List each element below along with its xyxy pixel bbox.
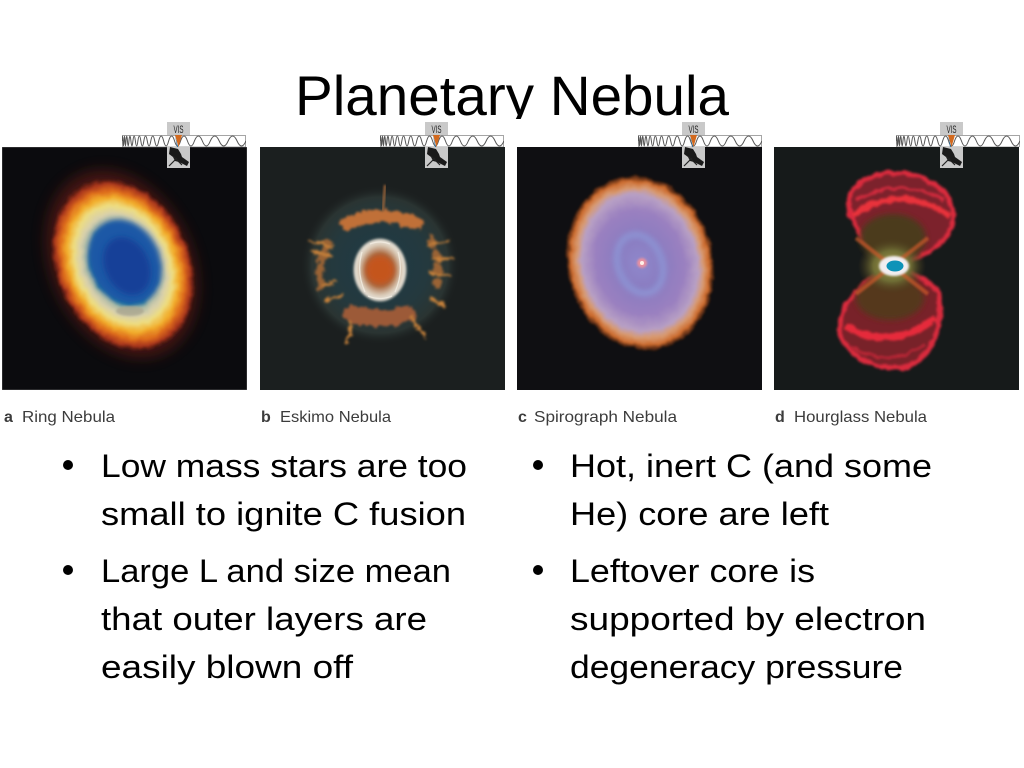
- bullet: low mass stars: [63, 448, 467, 532]
- panel: Eskimo Nebula: [260, 122, 505, 426]
- bullet: leftover core: [533, 553, 926, 685]
- left bullet list: [63, 448, 467, 685]
- spectrum icon c: VIS: [688, 124, 698, 136]
- bullet: leftover core: degeneracy pressure: [570, 649, 903, 685]
- panel: Ring Nebula: [2, 122, 247, 426]
- bullet: hot inert core: Hot, inert C (and some: [570, 448, 932, 484]
- photo: Ring Nebula: [2, 146, 247, 390]
- photo: Hourglass Nebula: [774, 147, 1019, 390]
- spectrum icon c: [638, 122, 762, 168]
- panel: Spirograph Nebula: [517, 122, 762, 426]
- bullet: leftover core: Leftover core is: [570, 553, 815, 589]
- caption b: Eskimo Nebula: [280, 409, 391, 426]
- spectrum icon d: [896, 122, 1020, 168]
- bullet: leftover core: supported by electron: [570, 601, 926, 637]
- spectrum icon b: [380, 122, 504, 168]
- caption d: Hourglass Nebula: [794, 409, 927, 426]
- caption a: Ring Nebula: [22, 409, 115, 426]
- bullet: large L and size: Large L and size mean: [101, 553, 451, 589]
- caption c: Spirograph Nebula: [534, 409, 677, 426]
- bullet: large L and size: that outer layers are: [101, 601, 427, 637]
- caption b: b: [261, 409, 271, 426]
- bullet: hot inert core: He) core are left: [570, 496, 829, 532]
- spectrum icon a: VIS: [174, 124, 184, 136]
- spectrum icon a: [122, 122, 246, 168]
- spectrum icon d: VIS: [946, 124, 956, 136]
- bullet: low mass stars: Low mass stars are too: [101, 448, 467, 484]
- caption a: a: [4, 409, 13, 426]
- bullet: large L and size: easily blown off: [101, 649, 353, 685]
- bullet: low mass stars: small to ignite C fusion: [101, 496, 466, 532]
- panel: Hourglass Nebula: [774, 122, 1020, 426]
- bullet: large L and size: [63, 553, 451, 685]
- spectrum icon b: VIS: [432, 124, 442, 136]
- right bullet list: [533, 448, 932, 685]
- bullet: hot inert core: [533, 448, 932, 532]
- photo: Eskimo Nebula: [260, 147, 505, 390]
- photo: Spirograph Nebula: [517, 147, 762, 390]
- caption c: c: [518, 409, 527, 426]
- title: Planetary Nebula: [295, 64, 730, 127]
- caption d: d: [775, 409, 785, 426]
